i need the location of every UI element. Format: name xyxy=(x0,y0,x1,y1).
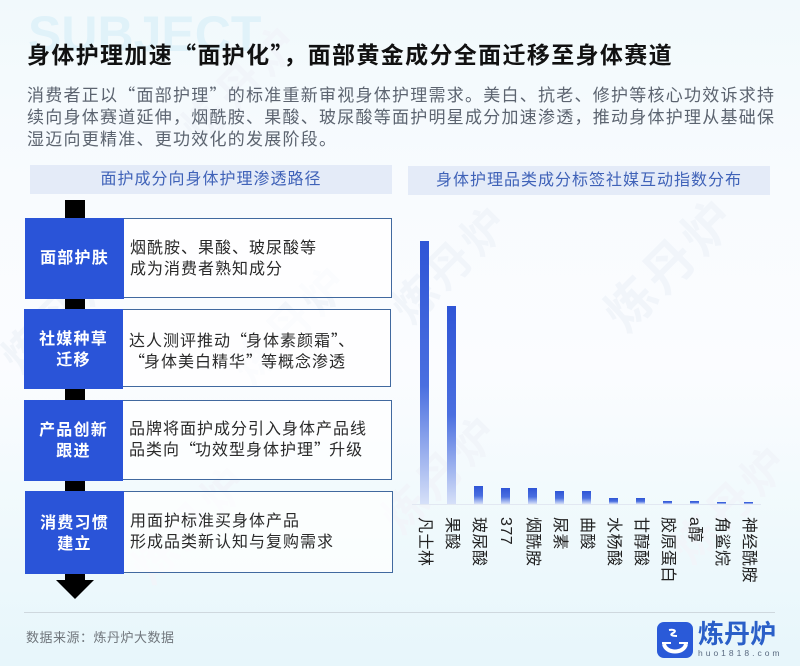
flow step 2: 迁移 xyxy=(56,352,91,368)
flow step 1 xyxy=(25,218,392,298)
panel heading: chart xyxy=(408,166,770,195)
category labels: 甘醇酸 xyxy=(632,517,649,567)
category labels: a醇 xyxy=(686,517,703,543)
flow step 3: 跟进 xyxy=(56,442,91,460)
panel heading: chart: 身体护理品类成分标签社媒互动指数分布 xyxy=(436,172,742,189)
icon: logo mark xyxy=(657,622,693,658)
category labels: 玻尿酸 xyxy=(470,517,487,567)
flow step 3: 产品创新 xyxy=(39,422,108,438)
intro text: 消费者正以“面部护理”的标准重新审视身体护理需求。美白、抗老、修护等核心功效诉求持 xyxy=(27,80,775,106)
flow step 3: 品类向“功效型身体护理”升级 xyxy=(129,436,363,460)
intro text: 湿迈向更精准、更功效化的发展阶段。 xyxy=(27,124,337,150)
background watermark: brand name pattern: 炼丹炉 xyxy=(594,188,748,342)
background watermark: brand name pattern: 炼丹炉 xyxy=(123,456,260,593)
panel heading: penetration path xyxy=(30,165,392,194)
data source: 数据来源：炼丹炉大数据 xyxy=(26,630,175,645)
flow step 2: 达人测评推动“身体素颜霜”、 xyxy=(129,326,355,350)
intro text xyxy=(27,80,775,150)
background watermark: brand name pattern: 炼丹炉 xyxy=(223,256,360,393)
flow step 4: 形成品类新认知与复购需求 xyxy=(130,534,334,551)
category labels: 曲酸 xyxy=(578,517,595,550)
category labels: 烟酰胺 xyxy=(524,517,541,567)
category labels: 果酸 xyxy=(443,517,460,550)
intro text: 续向身体赛道延伸，烟酰胺、果酸、玻尿酸等面护明星成分加速渗透，推动身体护理从基础保 xyxy=(27,102,775,128)
category labels: 胶原蛋白 xyxy=(659,517,676,583)
title: 身体护理加速“面护化”，面部黄金成分全面迁移至身体赛道 xyxy=(27,36,673,70)
category labels: 水杨酸 xyxy=(605,517,622,567)
footer divider xyxy=(24,612,775,613)
category labels: 角鲨烷 xyxy=(713,517,730,567)
flow step 4: 消费习惯 xyxy=(40,514,109,532)
background watermark: brand name pattern: 炼丹炉 xyxy=(383,196,520,333)
category labels: 凡士林 xyxy=(416,517,433,567)
flow step 2: 社媒种草 xyxy=(39,330,108,348)
brand logo xyxy=(657,614,783,658)
background watermark: brand name pattern: 炼丹炉 xyxy=(663,436,800,573)
brand url: huo1818.com xyxy=(698,648,783,658)
flow step 4: 建立 xyxy=(57,536,92,552)
panel heading: penetration path: 面护成分向身体护理渗透路径 xyxy=(100,171,322,188)
flow step 2: “身体美白精华”等概念渗透 xyxy=(129,348,346,372)
icon: vertical flow arrow xyxy=(56,200,94,599)
category labels: 尿素 xyxy=(551,517,568,550)
background watermark: SUBJECT: SUBJECT xyxy=(28,6,261,62)
flow step 3 xyxy=(24,400,392,480)
background watermark: brand name pattern: 炼丹炉 xyxy=(173,16,310,153)
flow step 4 xyxy=(25,491,393,573)
category labels: 377 xyxy=(497,517,514,545)
flow step 1: 烟酰胺、果酸、玻尿酸等 xyxy=(130,240,317,256)
flow step 4: 用面护标准买身体产品 xyxy=(130,513,300,530)
brand name: 炼丹炉 xyxy=(698,614,776,651)
category labels: 神经酰胺 xyxy=(740,517,757,583)
flow step 1: 面部护肤 xyxy=(40,250,109,266)
background watermark: brand name pattern: 炼丹炉 xyxy=(373,406,510,543)
flow step 2 xyxy=(24,309,391,387)
chart baseline xyxy=(412,504,761,505)
flow step 3: 品牌将面护成分引入身体产品线 xyxy=(129,414,367,438)
flow step 1: 成为消费者熟知成分 xyxy=(130,260,283,278)
